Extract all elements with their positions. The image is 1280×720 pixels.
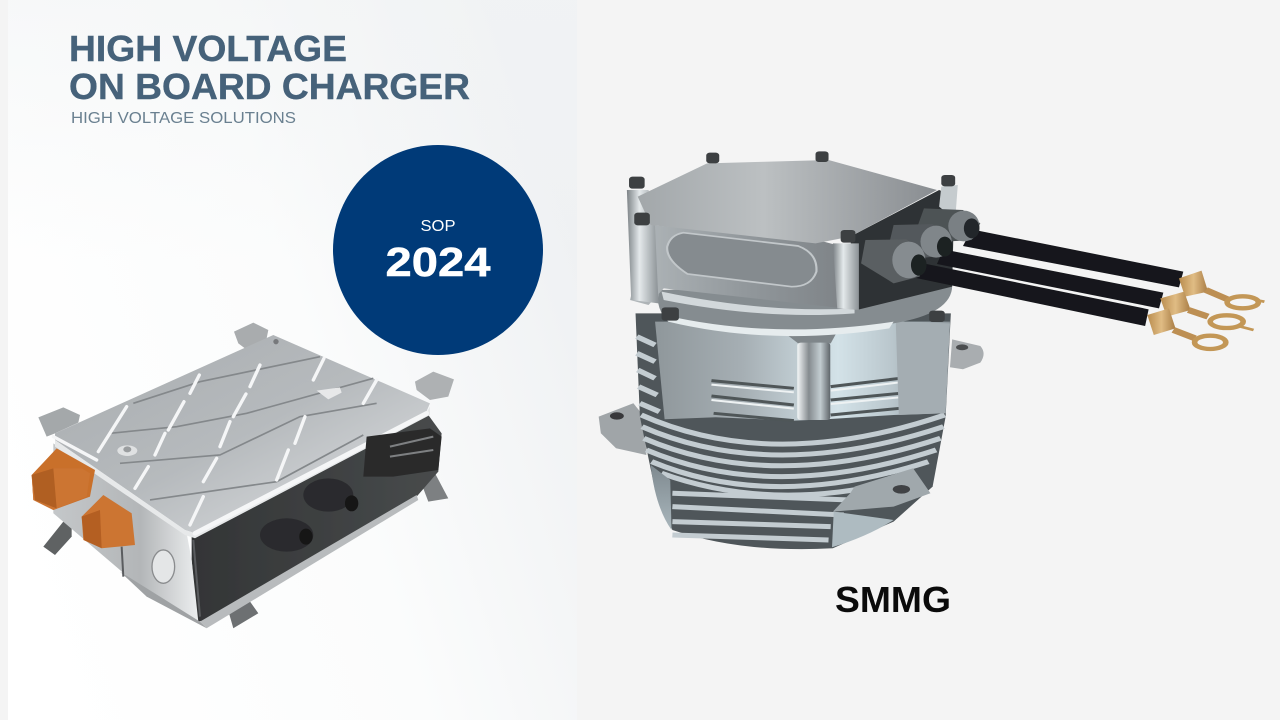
end wall cap [122, 540, 200, 617]
power cables [913, 229, 1183, 326]
label: SMMG: SMMG [835, 579, 951, 620]
lower silver casting [651, 465, 930, 547]
orange connector: large [32, 448, 95, 510]
subtitle: HIGH VOLTAGE SOLUTIONS [71, 110, 296, 127]
oval access cover [667, 233, 816, 287]
cooling fins [637, 337, 945, 540]
middle silver band [655, 322, 950, 421]
lid plate [55, 335, 430, 533]
terminal box right recess [850, 190, 954, 310]
dark round ports [260, 478, 358, 552]
base rail [200, 495, 418, 628]
dark side wall [192, 415, 442, 622]
title [69, 28, 470, 107]
illustration: on board charger unit [32, 323, 454, 628]
terminal box front [630, 225, 858, 310]
illustration: SMMG motor [599, 151, 1264, 549]
band fins [711, 378, 900, 421]
band post [785, 322, 950, 420]
lid ribs: bright [53, 358, 427, 533]
brass lugs [1147, 271, 1264, 349]
lid ribs: grey [110, 357, 377, 500]
motor body [636, 313, 951, 549]
badge: SOP 2024 [333, 145, 543, 355]
terminal box left post [627, 190, 659, 303]
orange connector: small [82, 495, 135, 548]
badge: SOP 2024: SOP [420, 218, 456, 235]
mounting feet [38, 323, 454, 628]
title: HIGH VOLTAGE [69, 28, 347, 69]
right rear mounting tab [950, 339, 984, 369]
hex bolts [629, 151, 955, 322]
title: ON BOARD CHARGER [69, 66, 470, 107]
left mounting tab [599, 403, 646, 455]
silver end wall [53, 443, 198, 622]
black signal connector [363, 428, 442, 477]
cable glands [861, 208, 980, 283]
terminal box top plate [638, 160, 937, 243]
lid details [117, 339, 342, 456]
panel: left charger background [8, 0, 577, 720]
flange disc [658, 283, 952, 332]
badge: SOP 2024: 2024 [386, 239, 491, 285]
